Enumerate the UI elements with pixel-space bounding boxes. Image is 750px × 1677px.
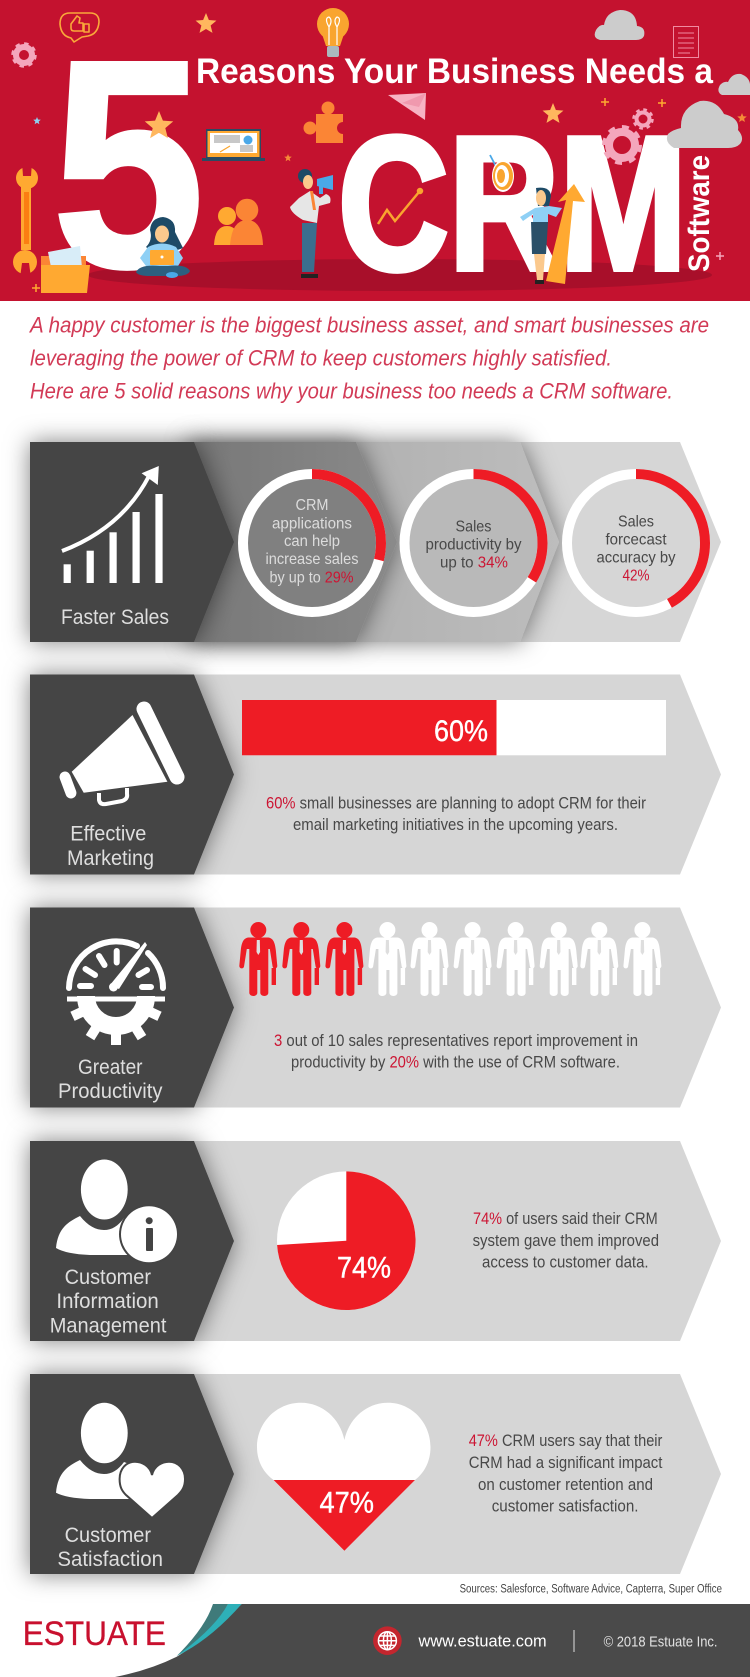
- panel title: Productivity: [58, 1079, 163, 1103]
- panel title: Marketing: [67, 846, 154, 870]
- ground shadow: [88, 259, 712, 291]
- panel title: [50, 1265, 166, 1338]
- description: 60% small businesses are planning to adopt CRM for their: [266, 794, 646, 812]
- ring: 42 percent: 42%: [622, 568, 650, 585]
- icon: pink gears: [604, 110, 652, 163]
- icon: pink gear left: [13, 44, 35, 66]
- logo: ESTUATE: ESTUATE: [23, 1615, 166, 1653]
- panel title: Effective: [70, 822, 146, 846]
- panel title: [58, 1055, 163, 1103]
- illustration: woman with laptop: [136, 217, 190, 278]
- icon: user with heart: [56, 1403, 185, 1518]
- icon: blue star: [33, 117, 41, 124]
- ring: 29 percent: applications: [272, 515, 352, 532]
- footer bar: [23, 1604, 750, 1677]
- panel title: Greater: [78, 1055, 142, 1079]
- description: [473, 1210, 659, 1272]
- ring: 42 percent: forcecast: [606, 532, 667, 549]
- icon: target with arrow: [490, 155, 514, 192]
- icon: megaphone: [65, 709, 177, 804]
- icon: laptop chart: [202, 129, 265, 161]
- icon: globe: [373, 1626, 402, 1655]
- header banner: [0, 0, 750, 329]
- icon: orange star right: [737, 113, 747, 122]
- description: customer satisfaction.: [492, 1498, 638, 1516]
- intro paragraph: [28, 313, 709, 404]
- heart chart 47 percent: 47%: [320, 1487, 374, 1520]
- panel title: Faster Sales: [61, 605, 169, 629]
- ring: 42 percent: [567, 474, 705, 612]
- panel title: [57, 1523, 163, 1571]
- description: [469, 1432, 663, 1516]
- icon: user with info badge: [56, 1160, 179, 1264]
- intro paragraph: Here are 5 solid reasons why your business too needs a CRM software.: [30, 379, 673, 404]
- icon: light bulb: [317, 8, 349, 57]
- plus mark right: [716, 252, 724, 260]
- panel title: Information: [56, 1289, 159, 1313]
- pictogram: 3 of 10 people red: [239, 922, 661, 996]
- icon: rising bar chart: [62, 466, 163, 583]
- icon: paper plane: [388, 93, 426, 120]
- pie chart 74 percent: [277, 1171, 416, 1310]
- icon: puzzle piece: [304, 102, 349, 143]
- icon: thumbs-up speech bubble: [60, 13, 99, 42]
- description: email marketing initiatives in the upcoming years.: [293, 816, 618, 834]
- panel title: Customer: [65, 1265, 151, 1289]
- icon: gauge gear: [67, 941, 165, 1045]
- progress bar 60 percent: [242, 700, 666, 755]
- plus marks: [601, 98, 666, 107]
- panel title: Satisfaction: [57, 1547, 163, 1571]
- icon: large cloud: [667, 101, 742, 148]
- illustration: man with megaphone: [290, 169, 333, 278]
- icon: document: [674, 26, 698, 58]
- ring: 42 percent: Sales: [618, 514, 654, 531]
- website: www.estuate.com: [418, 1632, 547, 1651]
- copyright: © 2018 Estuate Inc.: [604, 1635, 718, 1651]
- panel: greater productivity: [30, 908, 721, 1108]
- panel: effective marketing: [30, 674, 721, 874]
- ring: 29 percent: [243, 474, 381, 612]
- icon: right cloud: [718, 74, 750, 95]
- icon: folder with papers: [32, 246, 90, 293]
- title line: Reasons Your Business Needs a: [196, 52, 713, 91]
- icon: large star: [145, 111, 173, 138]
- intro paragraph: leveraging the power of CRM to keep customers highly satisfied.: [30, 346, 612, 371]
- description: [274, 1032, 638, 1072]
- illustration: woman with arrow: [520, 188, 562, 284]
- ring: 34 percent: up to 34%: [440, 554, 508, 571]
- panel title: Customer: [65, 1523, 151, 1547]
- icon: small orange star: [284, 154, 292, 161]
- ring: 34 percent: productivity by: [426, 536, 522, 553]
- ring: 29 percent: by up to 29%: [270, 569, 354, 586]
- ring: 34 percent: [404, 474, 542, 612]
- panel: customer satisfaction: [30, 1374, 721, 1574]
- chevron backgrounds: [30, 442, 721, 642]
- ring: 42 percent: accuracy by: [596, 550, 676, 567]
- panel title: Management: [50, 1314, 166, 1338]
- icon: star right: [543, 103, 563, 123]
- description: [266, 794, 646, 834]
- panel: faster sales: [30, 442, 721, 642]
- ring: 29 percent: increase sales: [266, 551, 358, 568]
- Software rotated label: Software: [683, 155, 716, 272]
- heart chart 47 percent: [257, 1403, 430, 1551]
- description: system gave them improved: [473, 1232, 659, 1250]
- icon: growth line: [378, 189, 422, 224]
- pie chart 74 percent: 74%: [337, 1252, 391, 1285]
- ring: 29 percent: can help: [284, 533, 340, 550]
- panel title: [67, 822, 154, 870]
- icon: users: [214, 199, 263, 245]
- illustration: orange arrow: [546, 184, 585, 284]
- description: access to customer data.: [482, 1254, 649, 1272]
- icon: top cloud: [595, 10, 644, 40]
- panel: customer information management: [30, 1141, 721, 1341]
- big number 5: 5: [52, 0, 205, 329]
- ring: 29 percent: CRM: [296, 497, 328, 514]
- description: 74% of users said their CRM: [473, 1210, 658, 1228]
- description: 3 out of 10 sales representatives report improvement in: [274, 1032, 638, 1050]
- description: 47% CRM users say that their: [469, 1432, 663, 1450]
- description: productivity by 20% with the use of CRM software.: [291, 1054, 620, 1072]
- icon: star: [196, 13, 216, 33]
- icon: wrench: [13, 162, 38, 278]
- description: on customer retention and: [478, 1476, 653, 1494]
- description: CRM had a significant impact: [469, 1454, 663, 1472]
- ring: 34 percent: Sales: [456, 519, 492, 536]
- teal accent: [177, 1604, 242, 1656]
- progress bar 60 percent: 60%: [434, 715, 488, 748]
